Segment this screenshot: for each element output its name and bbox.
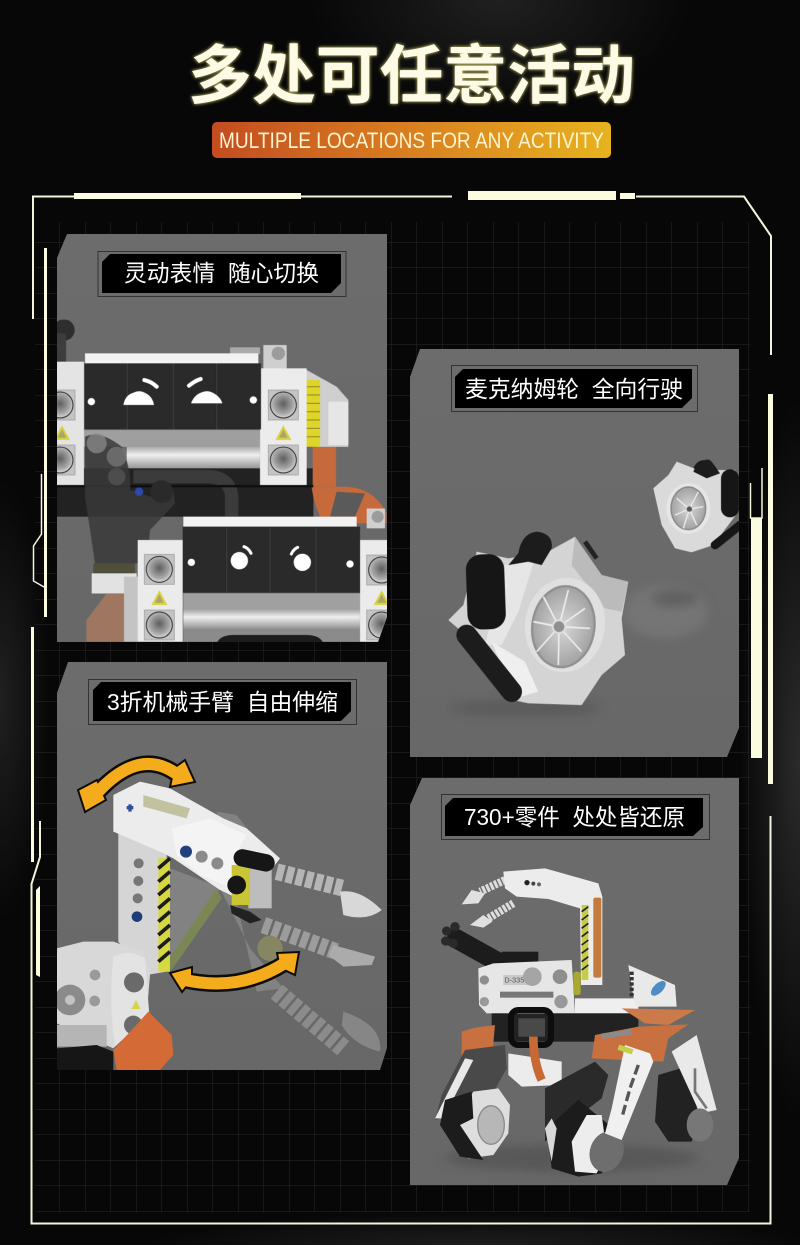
robot body (57, 942, 150, 1048)
undercarriage (492, 1013, 638, 1042)
main arm body (118, 832, 167, 975)
panel: 730+ parts (410, 778, 739, 1185)
complete robot (435, 868, 717, 1177)
gun (448, 934, 503, 965)
claws (480, 880, 505, 892)
mecanum wheels (448, 460, 740, 717)
left leg and wheel (435, 1045, 507, 1120)
panel: mecanum wheel (410, 349, 740, 757)
label: 730+零件 处处皆还原 (442, 794, 710, 840)
subtitle banner (212, 122, 611, 158)
label: 3折机械手臂 自由伸缩 (88, 680, 356, 724)
faded robot arm (85, 435, 175, 563)
center leg and wheel (545, 1062, 608, 1142)
panel: flexible expressions (45, 234, 397, 643)
label: 麦克纳姆轮 全向行驶: 麦克纳姆轮 全向行驶 (465, 376, 683, 402)
small wheel (653, 460, 740, 552)
mechanical arm illustration (55, 782, 382, 1070)
tech frame (31, 191, 773, 1224)
double arrows (78, 760, 299, 992)
panel: 3-fold arm (55, 662, 387, 1070)
label: 3折机械手臂 自由伸缩: 3折机械手臂 自由伸缩 (107, 689, 338, 715)
label: 灵动表情 随心切换: 灵动表情 随心切换 (124, 260, 319, 286)
arm (503, 868, 602, 985)
rear right leg and wheel (655, 1065, 698, 1142)
subtitle banner: MULTIPLE LOCATIONS FOR ANY ACTIVITY (219, 128, 604, 153)
title: 多处可任意活动 (188, 25, 635, 117)
complete robot: D-335 (504, 975, 524, 984)
ghost arm positions (163, 812, 380, 1052)
label: 730+零件 处处皆还原: 730+零件 处处皆还原 (464, 804, 685, 830)
claw (277, 872, 343, 888)
label: 麦克纳姆轮 全向行驶 (452, 366, 698, 412)
label: 灵动表情 随心切换 (98, 252, 346, 296)
body (478, 960, 575, 1013)
orange armor (622, 1008, 695, 1025)
robot heads with expressions (45, 319, 397, 643)
large wheel (448, 532, 628, 705)
